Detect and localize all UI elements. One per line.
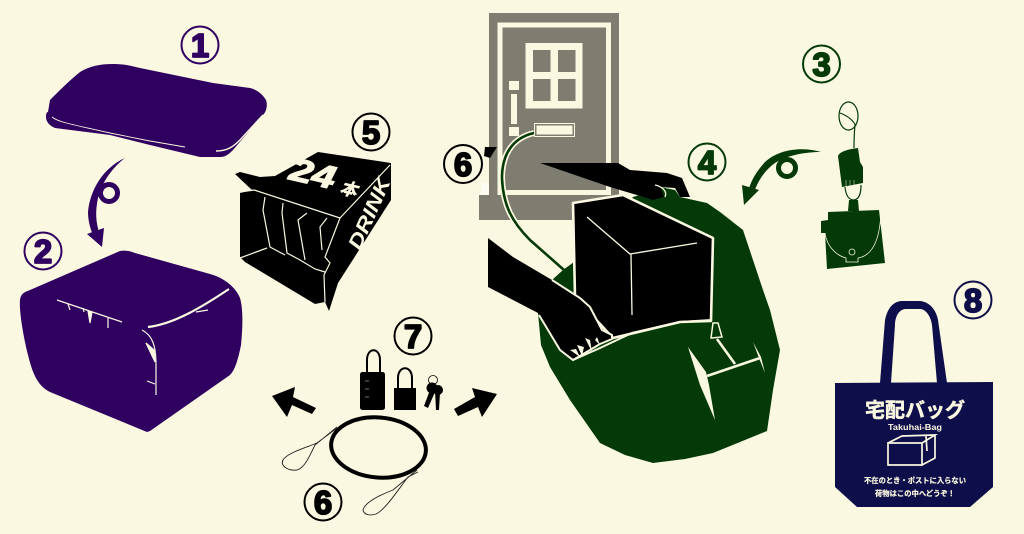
parcel box	[573, 195, 713, 338]
number 3: 3	[812, 46, 831, 83]
arrow left	[272, 387, 316, 417]
number 1	[182, 26, 218, 64]
number 6	[304, 484, 342, 521]
tote bag item 8	[835, 301, 993, 507]
pad item 1	[46, 64, 267, 157]
drink box item 5: 本	[338, 178, 361, 201]
number 6: 6	[314, 484, 332, 521]
upper arm and hand	[540, 163, 690, 200]
number 4	[688, 144, 726, 181]
delivery bag	[538, 187, 780, 463]
number 2	[24, 232, 62, 270]
number 7: 7	[404, 318, 422, 355]
number 2: 2	[34, 233, 52, 270]
lower arm and hand	[488, 238, 711, 360]
keys	[424, 376, 443, 410]
pouch with key strap item 3	[821, 102, 885, 269]
arrow right	[454, 388, 497, 417]
number 7	[394, 318, 432, 355]
wire cable lock item 6	[282, 413, 428, 515]
drink box item 5: 24	[285, 150, 340, 196]
storage box item 2	[20, 251, 242, 432]
drink box item 5	[235, 150, 396, 311]
combination padlock	[360, 350, 385, 410]
tote bag item 8: Takuhai-Bag	[888, 423, 942, 432]
curved arrow purple	[87, 158, 125, 247]
drink box item 5: DRINK	[344, 173, 396, 253]
cable from door to bag	[502, 133, 564, 270]
number 5	[352, 114, 390, 151]
number 6 prime	[444, 145, 497, 183]
number 8: 8	[964, 282, 982, 319]
number 6 prime: 6	[454, 146, 472, 183]
curved arrow green	[742, 149, 821, 205]
number 4: 4	[698, 144, 717, 181]
tote bag item 8: 不在のとき・ポストに入らない	[864, 476, 966, 485]
pad item 1 highlights	[52, 115, 263, 151]
number 8	[954, 282, 992, 319]
number 1: 1	[191, 27, 209, 64]
door	[479, 13, 620, 220]
number 5: 5	[362, 114, 380, 151]
tote bag item 8: 宅配バッグ	[865, 398, 965, 422]
small padlock	[394, 368, 416, 410]
number 3	[803, 46, 840, 83]
tote bag item 8: 荷物はこの中へどうぞ！	[875, 489, 955, 498]
